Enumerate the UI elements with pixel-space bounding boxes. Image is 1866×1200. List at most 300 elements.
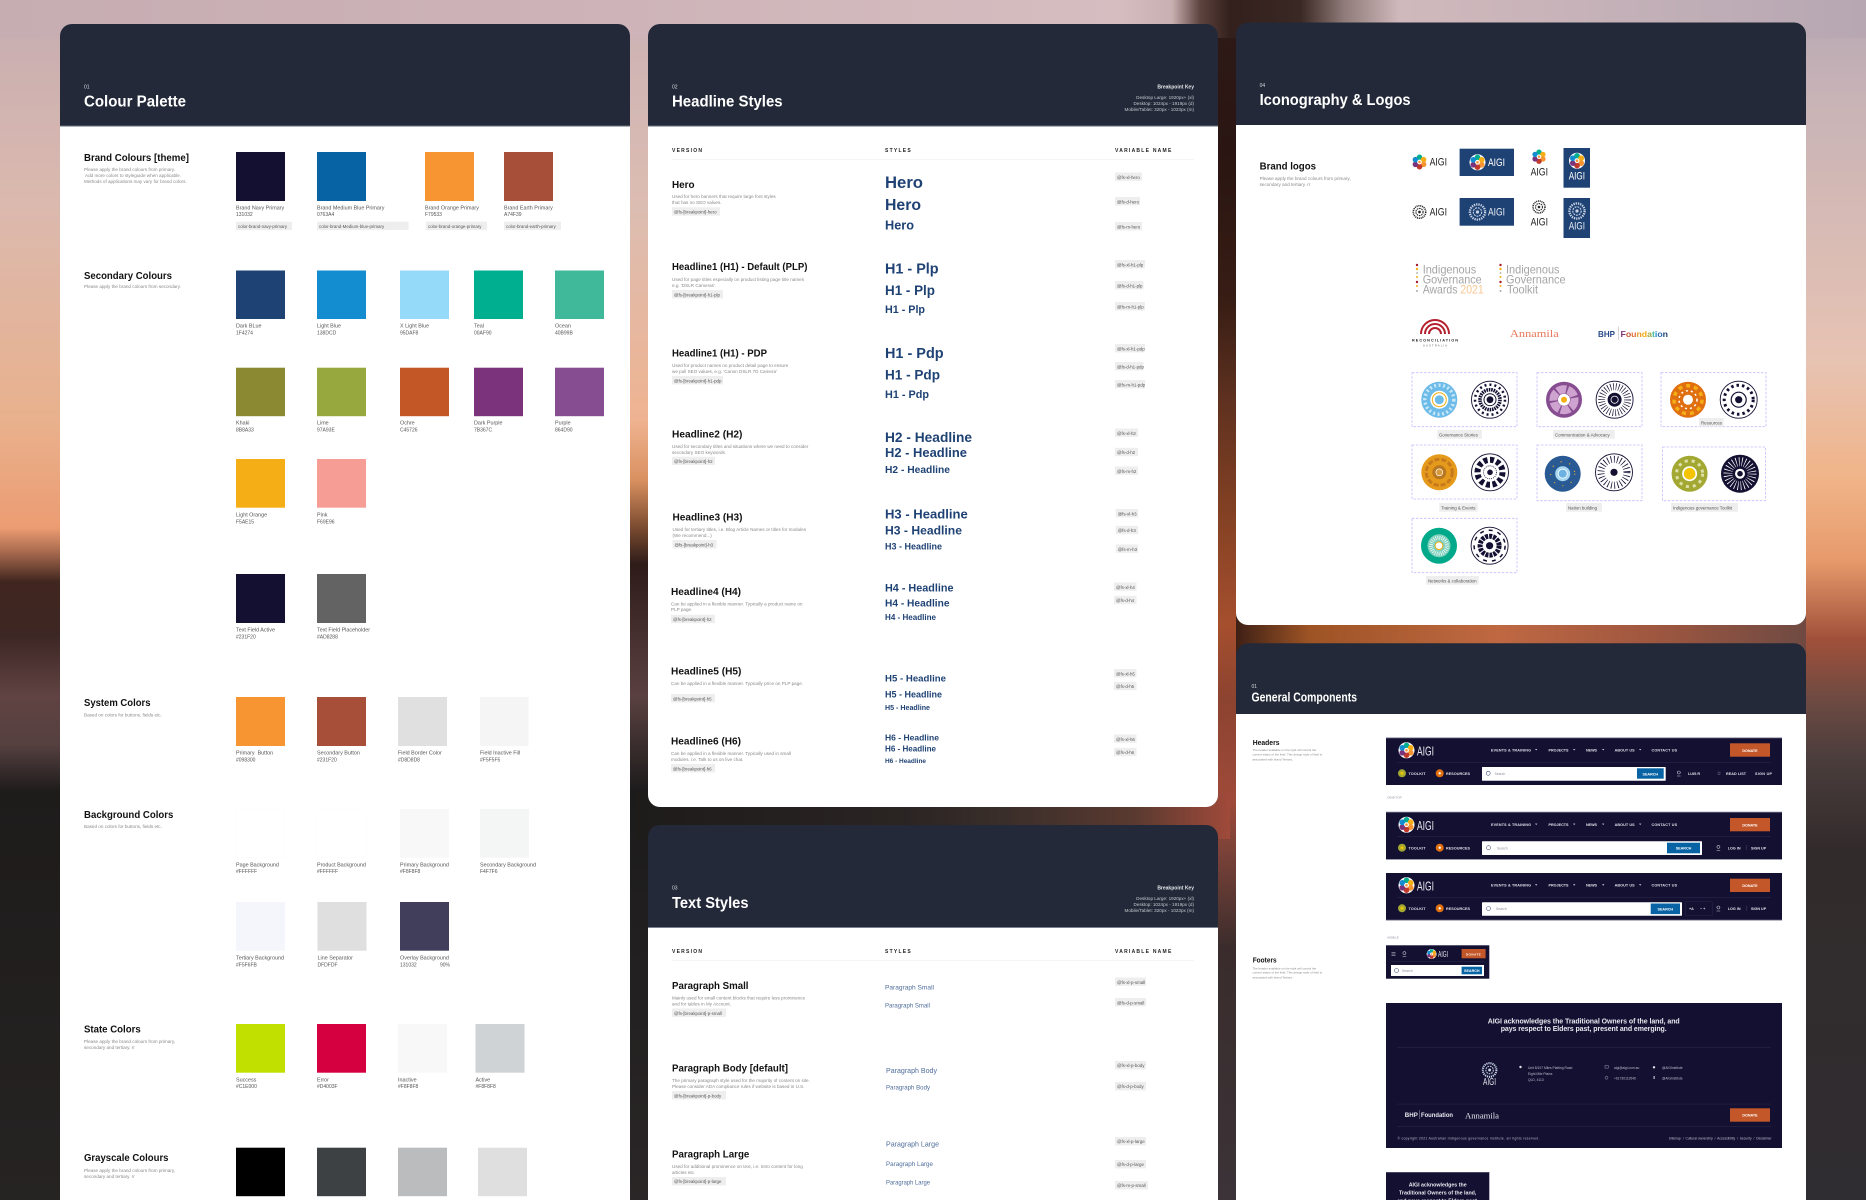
row: paragraph body: The primary paragraph style used for the majority of content on site. — [672, 1078, 810, 1083]
row: h6: Headline6 (H6) — [671, 736, 741, 747]
row: h1 plp: e.g. 'DSLR Cameras'. — [672, 283, 716, 288]
table header row — [672, 949, 1194, 961]
section: background colors — [84, 810, 174, 829]
icon: training colour — [1421, 454, 1457, 490]
swatch: brand medium blue — [317, 152, 409, 230]
swatch: x light blue: X Light Blue — [400, 324, 429, 330]
swatch: purple — [555, 368, 604, 434]
swatch: x light blue: 95DAF8 — [400, 331, 419, 337]
row: h6: @fs-[breakpoint]-h6 — [673, 766, 712, 771]
panel title: iconography and logos: Iconography & Logos — [1260, 92, 1411, 109]
logo: indigenous governance toolkit: Governance — [1506, 273, 1566, 287]
row: h2: @fs-[breakpoint]-h2 — [674, 459, 713, 464]
swatch: overlay background: 90% — [440, 963, 451, 969]
row: paragraph large: Paragraph Large — [672, 1149, 750, 1160]
icon: communication outline — [1596, 381, 1633, 418]
swatch: page background: Page Background — [236, 863, 279, 869]
component: desktop header logged out: DONATE — [1742, 824, 1758, 828]
breakpoint key: Breakpoint Key — [1157, 85, 1194, 91]
breakpoint key: Desktop Large: 1920px+ (xl) — [1136, 95, 1194, 100]
row: h2: H2 - Headline — [885, 430, 972, 445]
section: headers: The header available on the right will control the — [1252, 748, 1317, 752]
swatch: pink — [317, 459, 366, 525]
component: desktop header with text resize — [1386, 873, 1782, 921]
component: desktop header logged in: ABOUT US — [1615, 748, 1635, 752]
section: state colors: State Colors — [84, 1025, 141, 1036]
swatch: text field active — [236, 574, 285, 641]
row: paragraph large: @fs-[breakpoint]-p-large — [674, 1179, 722, 1184]
section: brand colours — [84, 153, 189, 184]
row: h3: Headline3 (H3) — [672, 512, 742, 523]
swatch: ochre — [400, 368, 449, 434]
footer acknowledgement: AIGI acknowledges the Traditional Owners of the land, and — [1488, 1018, 1680, 1025]
footer contact details: QLD, 4113 — [1528, 1078, 1544, 1082]
icon: networks outline — [1471, 527, 1508, 564]
row: paragraph small: Paragraph Small — [885, 984, 935, 991]
row: paragraph large: articles etc. — [672, 1170, 695, 1175]
panel number 03: 03 — [672, 886, 678, 892]
component: desktop header with text resize: LOG IN — [1728, 907, 1741, 911]
logo: colour stacked on blue — [1564, 148, 1590, 188]
section: grayscale colours: Please apply the brand colours from primary, — [84, 1168, 175, 1173]
component: mobile header: AIGI — [1438, 950, 1448, 959]
panel number 01: 01 — [84, 85, 90, 91]
swatch: text field active: Text Field Active — [236, 628, 275, 634]
row: paragraph small: Mainly used for small content blocks that require less prominence — [672, 995, 805, 1000]
row: h2: H2 - Headline — [885, 445, 967, 460]
swatch: line separator — [318, 902, 366, 969]
swatch: secondary background: Secondary Background — [480, 863, 536, 869]
swatch: ochre: C45726 — [400, 428, 418, 434]
icon set: networks and collaboration — [1412, 518, 1517, 585]
row: h3: H3 - Headline — [885, 507, 968, 521]
swatch: inactive: #F8F8F8 — [398, 1084, 419, 1090]
swatch: light blue: Light Blue — [317, 324, 341, 330]
row: paragraph small: @fs-[breakpoint]-p-small — [674, 1011, 722, 1016]
component: mobile header — [1386, 945, 1489, 979]
row: h6: @fs-d-h6 — [1116, 750, 1135, 755]
swatch: dark purple — [474, 368, 523, 434]
panel title: general components: General Components — [1252, 690, 1357, 704]
section: brand colours: Brand Colours [theme] — [84, 153, 189, 164]
row: h5: H5 - Headline — [885, 689, 942, 699]
row: h6: H6 - Headline — [885, 758, 926, 765]
icon label: governance stories: Governance Stories — [1439, 432, 1479, 437]
panel title: headline styles: Headline Styles — [672, 94, 783, 111]
logo: colour stacked: AIGI — [1531, 167, 1548, 179]
swatch: brand navy — [236, 152, 292, 230]
row: hero: Hero — [885, 217, 914, 232]
row: h5: H5 - Headline — [885, 673, 946, 684]
logo: mono horizontal: AIGI — [1430, 207, 1447, 219]
icon: communication colour — [1546, 382, 1582, 418]
row: h6 — [671, 733, 1136, 772]
swatch: secondary button: Secondary Button — [317, 751, 360, 757]
row: h1 pdp: @fs-d-h1-pdp — [1117, 364, 1144, 369]
swatch: field border color: #D8D8D8 — [398, 758, 420, 764]
swatch: mid gray — [398, 1148, 447, 1196]
swatch: light orange: Light Orange — [236, 513, 267, 519]
component: desktop header logged in: TOOLKIT — [1408, 772, 1426, 776]
swatch: success: #C1E000 — [236, 1084, 257, 1090]
swatch: brand medium blue: 0763A4 — [317, 212, 334, 218]
row: paragraph large: Used for additional prominence on text, i.e. Intro content for long — [672, 1164, 803, 1169]
panel title: text styles: Text Styles — [672, 895, 748, 912]
swatch: ocean — [555, 270, 604, 337]
row: h1 pdp: @fs-xl-h1-pdp — [1117, 346, 1145, 351]
row: paragraph body: @fs-[breakpoint]-p-body — [674, 1093, 722, 1098]
component: desktop header logged in: LUIS R — [1688, 772, 1700, 776]
row: h6: modules, i.e. Talk to us on live chat. — [671, 757, 743, 762]
table header row: STYLES — [885, 148, 912, 154]
icon: governance stories outline — [1472, 381, 1508, 418]
component: desktop header logged out: LOG IN — [1728, 846, 1741, 850]
row: h5: Headline5 (H5) — [671, 666, 741, 677]
section: secondary colours: Secondary Colours — [84, 271, 172, 282]
footer links: Sitemap / Cultural ownership / Accessibility / Security / Disclaimer — [1669, 1136, 1772, 1140]
row: paragraph small: @fs-d-p-small — [1117, 1000, 1144, 1005]
panel: text styles — [648, 825, 1218, 1200]
logo: indigenous governance awards 2021: Governance — [1423, 273, 1482, 287]
component: desktop header logged out: AIGI — [1417, 818, 1434, 833]
row: h4: PLP page. — [671, 607, 692, 612]
swatch: inactive: Inactive — [398, 1078, 417, 1084]
swatch: field border color — [398, 697, 447, 764]
component: desktop header with text resize: ABOUT US — [1615, 884, 1635, 888]
caption: desktop: DESKTOP — [1387, 795, 1402, 799]
breakpoint key: Desktop: 1024px - 1919px (d) — [1133, 902, 1194, 907]
swatch: purple: 864D90 — [555, 428, 573, 434]
row: h3: @fs-[breakpoint]-h3 — [674, 542, 714, 547]
swatch: charcoal — [317, 1148, 366, 1196]
row: h5: H5 - Headline — [885, 704, 930, 712]
breakpoint key — [1125, 85, 1194, 112]
footer donate button — [1730, 1108, 1770, 1122]
footer acknowledgement: pays respect to Elders past, present and emerging. — [1501, 1026, 1667, 1033]
row: h4: Headline4 (H4) — [671, 587, 741, 598]
logo: colour horizontal on blue — [1460, 149, 1514, 176]
swatch: ocean: Ocean — [555, 324, 571, 330]
swatch: light gray — [478, 1148, 527, 1196]
breakpoint key: Mobile/Tablet: 320px - 1023px (m) — [1125, 908, 1194, 913]
row: h1 pdp: H1 - Pdp — [885, 367, 940, 382]
row: paragraph body: @fs-xl-p-body — [1117, 1063, 1145, 1068]
row: h4: @fs-[breakpoint]-h2 — [673, 617, 712, 622]
row: h1 plp: H1 - Plp — [885, 261, 939, 277]
row: h3: H3 - Headline — [885, 541, 942, 551]
swatch: text field placeholder — [317, 574, 370, 641]
row: hero: @fs-[breakpoint]-hero — [674, 210, 717, 215]
icon label: networks and collaboration: Networks & collaboration — [1428, 578, 1477, 583]
row: h2: H2 - Headline — [885, 465, 950, 476]
section: headers: current status of the field. This design style of field is — [1252, 753, 1322, 757]
row: h1 pdp: @fs-[breakpoint]-h1-pdp — [674, 378, 722, 383]
panel: colour palette — [60, 24, 630, 1200]
logo: mono stacked on blue — [1564, 198, 1590, 238]
row: paragraph large: Paragraph Large — [886, 1180, 931, 1186]
swatch: product background — [317, 809, 366, 875]
row: h4: Can be applied in a flexible manner. Typically a product name on — [671, 601, 803, 606]
swatch: light orange: F5AE15 — [236, 519, 254, 525]
logo: indigenous governance toolkit: Indigenous — [1506, 262, 1560, 276]
component: desktop header logged in: SEARCH — [1643, 772, 1658, 776]
swatch: text field placeholder: #AD8288 — [317, 635, 338, 641]
swatch: active: Active — [476, 1078, 490, 1084]
component: desktop header with text resize: DONATE — [1742, 884, 1758, 888]
row: h1 plp: @fs-d-h1-plp — [1117, 283, 1143, 288]
swatch: brand earth — [504, 152, 561, 230]
component: desktop header logged in: ☆ — [1717, 771, 1722, 777]
swatch: brand navy: Brand Navy Primary — [236, 205, 285, 211]
swatch: brand earth: Brand Earth Primary — [504, 205, 553, 211]
row: paragraph large: @fs-xl-p-large — [1117, 1139, 1145, 1144]
section: footers: associated with brand Tertiary. — [1252, 975, 1293, 979]
logo: bhp foundation: Foundation — [1620, 329, 1668, 339]
icon label: training and events: Training & Events — [1441, 505, 1476, 510]
row: h3: Used for tertiary titles, i.e. Blog Article Names or titles for modules — [672, 527, 807, 532]
component: desktop header logged in: PROJECTS — [1548, 748, 1569, 752]
logo: indigenous governance awards 2021 — [1416, 262, 1484, 296]
swatch: line separator: DFDFDF — [318, 963, 338, 969]
swatch: brand medium blue: Brand Medium Blue Primary — [317, 205, 385, 211]
section: background colors: Based on colors for buttons, fields etc. — [84, 824, 162, 829]
row: h1 pdp: we pull SEO values, e.g. 'Canon DSLR 7D Camera' — [672, 369, 777, 374]
breakpoint key: Desktop: 1024px - 1919px (d) — [1133, 101, 1194, 106]
row: hero: @fs-m-hero — [1117, 224, 1141, 229]
swatch: brand navy: 131032 — [236, 212, 253, 218]
footer copyright: © copyright 2021 Australian Indigenous governance institute. all rights reserved. — [1398, 1136, 1540, 1140]
component: desktop header logged in: AIGI — [1417, 743, 1434, 758]
component: desktop header logged out: CONTACT US — [1652, 823, 1678, 827]
icon: nation building colour — [1545, 456, 1581, 492]
logo: mono horizontal on blue: AIGI — [1488, 207, 1505, 219]
swatch: success: Success — [236, 1078, 257, 1084]
swatch: line separator: Line Separator — [318, 956, 353, 962]
row: h4: H4 - Headline — [885, 613, 937, 622]
component: desktop header logged out: PROJECTS — [1548, 823, 1569, 827]
row: h6: H6 - Headline — [885, 733, 939, 743]
component: desktop header logged out: SIGN UP — [1751, 846, 1767, 850]
component: desktop header logged in: SIGN UP — [1755, 772, 1773, 776]
swatch: brand medium blue: color-brand-Medium-blue-primary — [319, 224, 385, 229]
component: desktop header with text resize: TOOLKIT — [1408, 907, 1426, 911]
table header row: VARIABLE NAME — [1115, 949, 1173, 955]
logo: indigenous governance awards 2021: Awards 2021 — [1423, 282, 1484, 296]
row: paragraph body: Paragraph Body — [886, 1084, 931, 1091]
component: desktop header logged in: DONATE — [1742, 749, 1758, 753]
icon set: communication and advocacy — [1537, 373, 1642, 439]
swatch: secondary background — [480, 809, 536, 875]
row: hero: Hero — [672, 180, 695, 191]
section: state colors: Please apply the brand colours from primary, — [84, 1039, 175, 1044]
icon: toolkit colour — [1672, 456, 1708, 492]
row: h5: @fs-[breakpoint]-h5 — [673, 696, 712, 701]
section: footers: current status of the field. This design style of field is — [1252, 971, 1322, 975]
panel: iconography and logos — [1236, 22, 1806, 625]
swatch: secondary button: #231F20 — [317, 758, 337, 764]
row: h1 plp: @fs-xl-h1-plp — [1117, 262, 1144, 267]
swatch: secondary background: F4F7F6 — [480, 869, 498, 875]
breakpoint key — [1125, 886, 1194, 913]
component: desktop header with text resize: CONTACT US — [1652, 884, 1678, 888]
footer logo: AIGI — [1483, 1077, 1496, 1088]
footer contact details: @AIGInstitute — [1662, 1077, 1683, 1081]
swatch: khaki — [236, 368, 285, 434]
swatch: light blue: 138DCD — [317, 331, 337, 337]
component: desktop header logged out: RESOURCES — [1446, 846, 1471, 850]
row: paragraph small: Paragraph Small — [885, 1003, 930, 1009]
logo: mono stacked on blue: AIGI — [1569, 221, 1585, 233]
swatch: khaki: Khaki — [236, 421, 250, 427]
component: mobile footer — [1386, 1172, 1489, 1200]
section: footers: Footers — [1253, 955, 1277, 964]
row: h3 — [672, 507, 1138, 553]
icon: resources colour — [1670, 382, 1706, 418]
swatch: dark blue: Dark BLue — [236, 324, 261, 330]
row: paragraph small — [672, 978, 1146, 1017]
row: h4: @fs-xl-h4 — [1116, 585, 1135, 590]
component: desktop header with text resize: +A — [1689, 907, 1694, 911]
swatch: dark purple: Dark Purple — [474, 421, 502, 427]
row: h1 pdp: H1 - Pdp — [885, 389, 929, 401]
swatch: ocean: 40B99B — [555, 331, 573, 337]
component: desktop header logged in: EVENTS & TRAINING — [1491, 748, 1531, 752]
row: h1 plp — [672, 260, 1145, 316]
row: h6: @fs-xl-h6 — [1116, 737, 1135, 742]
swatch: lime: Lime — [317, 421, 329, 427]
swatch: dark blue: 1F4274 — [236, 331, 253, 337]
component: mobile footer: AIGI acknowledges the — [1409, 1183, 1467, 1189]
table header row: VERSION — [672, 949, 703, 955]
section: brand logos: Brand logos — [1260, 161, 1316, 172]
swatch: brand orange: color-brand-orange-primary — [428, 224, 482, 229]
section: system colors: System Colors — [84, 698, 151, 709]
icon: resources outline — [1720, 381, 1757, 418]
logo: mono horizontal on blue — [1460, 198, 1514, 226]
row: h1 plp: Used for page titles especially on product listing page title names — [672, 277, 805, 282]
footer contact details: Eight Mile Plains — [1528, 1072, 1553, 1076]
row: hero — [672, 172, 1142, 232]
swatch: overlay background: Overlay Background — [400, 956, 449, 962]
row: h4 — [671, 582, 1136, 623]
icon set: governance stories — [1412, 373, 1517, 439]
row: h4: @fs-d-h4 — [1116, 598, 1135, 603]
component: desktop header with text resize: SEARCH — [1658, 908, 1673, 912]
row: h3: @fs-m-h3 — [1118, 547, 1138, 552]
logo: colour horizontal — [1412, 154, 1447, 170]
icon set: nation building — [1537, 445, 1642, 512]
component: desktop header logged out: SEARCH — [1676, 847, 1692, 851]
row: h2: @fs-xl-h2 — [1117, 431, 1136, 436]
row: paragraph large: @fs-m-p-small — [1117, 1183, 1146, 1188]
section: grayscale colours: secondary and tertiary. rr — [84, 1174, 135, 1179]
swatch: error: #D4003F — [317, 1084, 338, 1090]
icon set: training and events — [1412, 445, 1517, 512]
section: background colors: Background Colors — [84, 810, 174, 821]
row: paragraph small: and for tables in My Account. — [672, 1001, 731, 1006]
row: hero: Hero — [885, 197, 921, 214]
logo: reconciliation australia — [1412, 320, 1458, 348]
swatch: brand earth: A74F39 — [504, 212, 522, 218]
swatch: tertiary background: #F5F6FB — [236, 963, 258, 969]
swatch: page background — [236, 809, 285, 875]
row: h2: @fs-d-h2 — [1117, 450, 1136, 455]
footer contact details — [1519, 1066, 1683, 1082]
logo: reconciliation australia: AUSTRALIA — [1423, 344, 1447, 348]
component: mobile footer: Traditional Owners of the land, — [1399, 1191, 1477, 1197]
swatch: field border color: Field Border Color — [398, 751, 442, 757]
row: h1 plp: @fs-m-h1-plp — [1117, 304, 1144, 309]
row: h5: @fs-xl-h5 — [1116, 671, 1135, 676]
component: desktop header with text resize: AIGI — [1417, 878, 1434, 893]
row: paragraph large: Paragraph Large — [886, 1141, 939, 1148]
table header row: VERSION — [672, 148, 703, 154]
table header row — [672, 148, 1194, 160]
section: brand colours: Add more colors to styleguide when applicable. — [85, 173, 181, 178]
swatch: black — [236, 1148, 285, 1196]
footer partner logos: BHP — [1405, 1112, 1418, 1119]
swatch: teal: 00AF90 — [474, 331, 492, 337]
row: h4: H4 - Headline — [885, 583, 954, 595]
row: h3: @fs-xl-h3 — [1118, 511, 1137, 516]
section: brand logos — [1260, 161, 1351, 187]
logo: bhp foundation: BHP — [1598, 329, 1615, 339]
icon label: resources: Resources — [1701, 420, 1723, 425]
swatch: pink: F69E96 — [317, 519, 335, 525]
swatch: lime — [317, 368, 366, 434]
section: system colors — [84, 698, 162, 718]
component: mobile header: SEARCH — [1464, 969, 1480, 973]
logo: mono stacked: AIGI — [1531, 216, 1548, 228]
section: grayscale colours — [84, 1153, 175, 1179]
footer contact details: aigi@aigi.com.au — [1614, 1066, 1640, 1070]
swatch: text field placeholder: Text Field Placeholder — [317, 628, 370, 634]
row: h2 — [672, 428, 1138, 476]
row: h5 — [671, 666, 1136, 712]
row: h2: Used for secondary titles and situations where we need to consider — [672, 444, 809, 449]
icon: training outline — [1472, 454, 1508, 491]
row: h4: H4 - Headline — [885, 598, 950, 609]
section: headers: Headers — [1253, 738, 1280, 747]
logo: bhp foundation — [1598, 326, 1668, 340]
row: h1 plp: @fs-[breakpoint]-h1-plp — [674, 292, 721, 297]
row: paragraph body: Paragraph Body — [886, 1068, 937, 1075]
logo: colour horizontal on blue: AIGI — [1488, 157, 1505, 169]
row: hero: @fs-d-hero — [1117, 199, 1140, 204]
component: desktop header with text resize: NEWS — [1586, 884, 1598, 888]
row: h2: secondary SEO keywords. — [672, 450, 726, 455]
swatch: light blue — [317, 270, 366, 337]
footer partner logos: Annamila — [1465, 1111, 1499, 1120]
row: h1 pdp: H1 - Pdp — [885, 346, 944, 362]
swatch: x light blue — [400, 270, 449, 337]
row: h2: Headline2 (H2) — [672, 429, 742, 440]
swatch: secondary button — [317, 697, 366, 764]
swatch: pink: Pink — [317, 513, 328, 519]
swatch: brand orange — [425, 152, 487, 230]
icon set: resources — [1661, 373, 1766, 427]
component: desktop header logged in: NEWS — [1586, 748, 1598, 752]
row: h3: @fs-d-h3 — [1118, 528, 1136, 533]
component: mobile header: DONATE — [1466, 952, 1481, 956]
footer partner logos — [1405, 1110, 1499, 1120]
row: h6: H6 - Headline — [885, 744, 937, 753]
logo: mono stacked — [1531, 200, 1548, 228]
row: h1 pdp: Headline1 (H1) - PDP — [672, 348, 767, 359]
icon: toolkit outline — [1721, 455, 1759, 493]
swatch: overlay background: 131032 — [400, 963, 417, 969]
footer partner logos: Foundation — [1421, 1112, 1453, 1119]
